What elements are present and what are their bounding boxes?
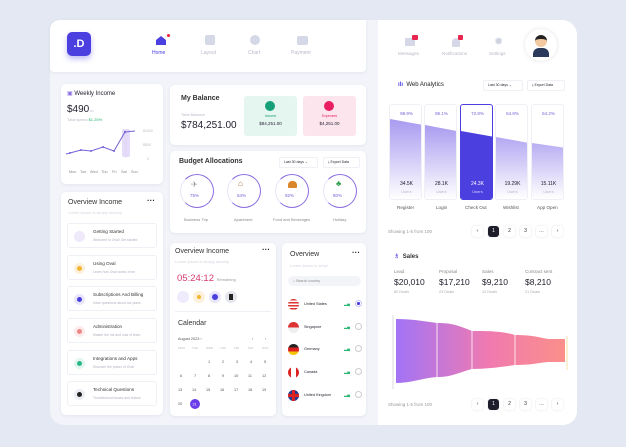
line chart: Sun [131,170,138,174]
calendar: 7 [194,374,196,378]
pagination 2: › [557,401,558,407]
ring holiday: 80% [333,193,342,198]
calendar: 4 [250,360,252,364]
card: overview income timer + calendar: Lorem Ipsum is simply dummy [175,259,229,264]
column wishlist: 19.29K [505,181,520,187]
nav: home [152,34,170,56]
column checkout [460,104,493,200]
calendar: ‹ [252,337,254,341]
pagination 2: ‹ [477,401,478,407]
calendar: 17 [234,388,238,392]
calendar: 19 [262,388,266,392]
item subscriptions: Have questions about our plans [93,301,141,305]
row germany: ▂▄ [344,346,350,351]
card: overview income timer + calendar: ··· [262,245,270,254]
calendar: FRI [234,346,239,350]
card: overview income list [61,192,163,415]
sales stats: 23 Deals [439,290,454,294]
main frame left background [50,20,577,425]
card: overview income timer + calendar [170,243,276,416]
card: overview countries: ··· [352,248,360,257]
column app open: 54.2% [542,111,555,116]
row singapore [288,322,362,333]
item technical: Technical Questions [93,387,134,392]
pagination 2: 1 [492,401,495,407]
right panel: ⤓ Export Data [532,83,553,87]
column register: 98.9% [400,111,413,116]
column login: Users [436,189,447,194]
nav: payment: Payment [291,50,311,56]
card: my balance [170,85,366,145]
sales stats: Sales [482,269,494,274]
funnel columns: Login [436,205,447,210]
sales stats: 80 Deals [394,290,409,294]
pagination 1: Showing 1-5 from 100 [388,229,432,234]
income box: $84,251.00 [259,121,282,126]
pagination 1: 3 [524,228,527,234]
pagination 2: … [539,401,544,407]
funnel columns [389,104,564,210]
calendar: 9 [222,374,224,378]
calendar: 16 [220,388,224,392]
card: my balance: My Balance [181,95,220,102]
item technical [67,381,157,406]
row canada [288,368,362,378]
calendar: 5 [264,360,266,364]
item integrations [67,350,157,375]
sales stats: 12 Deals [482,290,497,294]
card: overview countries: Overview [290,251,319,258]
item integrations: Discover the power of Oval [93,365,134,369]
ring business trip: ✈ [191,180,198,189]
pagination 1: 1 [492,228,495,234]
funnel columns: Check Out [465,205,487,210]
top icons: Settings [489,51,506,56]
avatar [525,29,557,61]
line chart: $500 [143,143,151,147]
pagination 2: 3 [524,401,527,407]
calendar: 11 [248,374,252,378]
row uk: ▂▄ [344,392,350,397]
card: budget allocations: Business Trip [184,217,208,222]
calendar: 18 [248,388,252,392]
row uk: United Kingdom [304,393,331,397]
item subscriptions: Subscriptions And Billing [93,292,143,297]
calendar: 6 [180,374,182,378]
column login [424,104,457,200]
column register [389,104,422,200]
item technical: Troubleshoot issues and review [93,396,141,400]
item integrations: Integrations and Apps [93,356,137,361]
line chart: $1000 [143,129,153,133]
logo: .D [74,38,84,50]
sales stats: 21 Deals [525,290,540,294]
line chart: Wed [90,170,98,174]
item using oval: Learn how Oval works, from [93,270,135,274]
right panel: Last 30 days ⌄ [488,83,512,87]
item using oval: Using Oval [93,261,115,266]
sales stats: $20,010 [394,277,425,287]
pagination 1: 2 [508,228,511,234]
column login: 86.1% [435,111,448,116]
card: weekly income: Total spend $1.25% [67,117,102,122]
card: overview income timer + calendar: 05:24:12 Remaining [177,273,236,284]
top icons: Messages [398,51,419,56]
calendar: WED [206,346,214,350]
row singapore: ▂▄ [344,324,350,329]
item subscriptions [67,286,157,311]
search: ⌕ Search country [293,279,320,283]
card: budget allocations: Food and Beverages [273,217,310,222]
pagination 2 [388,398,564,410]
calendar [178,337,268,409]
column login: 28.1K [435,181,448,187]
expenses box: Expenses [322,114,337,118]
ring food: 92% [285,193,294,198]
card: overview countries [282,243,366,416]
top icons: Notifications [442,51,467,56]
pagination 1 [388,226,564,238]
card: budget allocations: Last 30 days ⌄ [284,160,308,164]
line chart: 0 [147,157,149,161]
row canada: ▂▄ [344,369,350,374]
calendar: August 2023 › [178,337,202,341]
row us: ▂▄ [344,301,350,306]
card: budget allocations: Holiday [333,217,346,222]
ring holiday [323,174,357,208]
pagination 1: › [557,228,558,234]
column app open: Users [543,189,554,194]
item admin: Administration [93,324,122,329]
item using oval [67,255,157,280]
pagination 2: 2 [508,401,511,407]
item getting started: Welcome to Oval! Get started [93,238,137,242]
calendar: 14 [192,388,196,392]
ring apartment [227,174,261,208]
item admin [67,318,157,343]
row canada: Canada [304,370,317,374]
calendar: 10 [234,374,238,378]
calendar: 21 [192,402,197,406]
calendar: 20 [178,402,182,406]
nav: chart [248,35,260,56]
line chart: Fri [112,170,117,174]
card: overview income list: Lorem Ipsum is simply dummy [68,210,122,215]
logo [67,32,91,56]
action icons [177,291,237,303]
row us [288,299,362,310]
line chart [66,129,153,174]
calendar: 3 [236,360,238,364]
row uk [288,390,362,401]
row germany: Germany [304,347,320,351]
line chart: Sat [121,170,128,174]
column checkout: 24.3K [471,181,484,187]
card: overview income list: ··· [147,196,155,205]
item getting started: Getting Started [93,229,124,234]
expenses box [303,96,356,136]
calendar: SUN [262,346,268,350]
column app open [531,104,564,200]
calendar: 15 [206,388,210,392]
column wishlist: 64.8% [506,111,519,116]
pagination 2: Showing 1-5 from 100 [388,402,432,407]
calendar: 13 [178,388,182,392]
card: overview countries: Lorem Ipsum is simpl [290,263,328,268]
row germany [288,344,362,355]
sales stats: $17,210 [439,277,470,287]
sales stats: Contract sent [525,269,552,274]
column checkout: 72.8% [471,111,484,116]
top icons [398,35,506,56]
sales stats [394,269,552,294]
ring business trip: 75% [190,193,199,198]
pagination 1: … [539,228,544,234]
funnel columns: Register [397,205,414,210]
card: budget allocations [170,151,366,233]
funnel columns: Wishlist [503,205,519,210]
ring apartment: ⌂ [238,179,243,188]
right panel [378,20,577,425]
column checkout: Users [472,189,483,194]
nav: chart: Chart [248,50,260,56]
column register: Users [401,189,412,194]
card: weekly income: ▣ Weekly Income [67,91,115,97]
card: my balance: Total Balance [181,112,205,117]
income box [244,96,297,136]
funnel columns: App Open [537,205,558,210]
item admin: Master the ins and outs of team [93,333,140,337]
card: overview income timer + calendar: Overview Income [175,248,229,255]
ring food [275,174,309,208]
web analytics heading: ılı Web Analytics [398,82,444,88]
ring apartment: 64% [237,193,246,198]
item getting started [67,223,157,248]
card: budget allocations: Budget Allocations [179,158,243,165]
column wishlist: Users [507,189,518,194]
top icons: ✹ [494,36,503,48]
card: my balance: $784,251.00 [181,120,237,131]
calendar: THU [220,346,226,350]
card: overview income timer + calendar: Calendar [178,320,206,327]
ring holiday: ♣ [336,179,341,188]
sales funnel chart [392,315,568,389]
calendar: TUE [192,346,198,350]
nav: layout [201,35,216,56]
sales stats: Proposal [439,269,457,274]
calendar: 1 [208,360,210,364]
sales stats: $8,210 [525,277,551,287]
calendar: 8 [208,374,210,378]
expenses box: $4,251.00 [319,121,340,126]
pagination 1: ‹ [477,228,478,234]
calendar: 2 [222,360,224,364]
calendar: › [265,337,267,341]
nav: payment [291,36,311,56]
search [288,276,361,286]
header card [50,20,366,72]
sales heading: ♗ Sales [394,254,418,260]
column wishlist [495,104,528,200]
card: budget allocations: ⤓ Export Data [328,160,349,164]
calendar: SAT [248,346,254,350]
card: budget allocations: Apartment [234,217,252,222]
column register: 34.5K [400,181,413,187]
sales stats: $9,210 [482,277,508,287]
card: weekly income [61,84,163,184]
sales stats: Lead [394,269,404,274]
row singapore: Singapore [304,325,321,329]
calendar: MON [178,346,185,350]
card: overview income list: Overview Income [68,199,122,206]
nav: home: Home [152,50,165,56]
column app open: 15.11K [541,181,556,187]
row us: United States [304,302,327,306]
line chart: Tue [80,170,86,174]
ring business trip [180,174,214,208]
calendar: 12 [262,374,266,378]
nav: layout: Layout [201,50,216,56]
card: weekly income: $490.00 [67,104,93,115]
line chart: Mon [69,170,76,174]
line chart: Thu [101,170,108,174]
income box: Income [265,114,276,118]
